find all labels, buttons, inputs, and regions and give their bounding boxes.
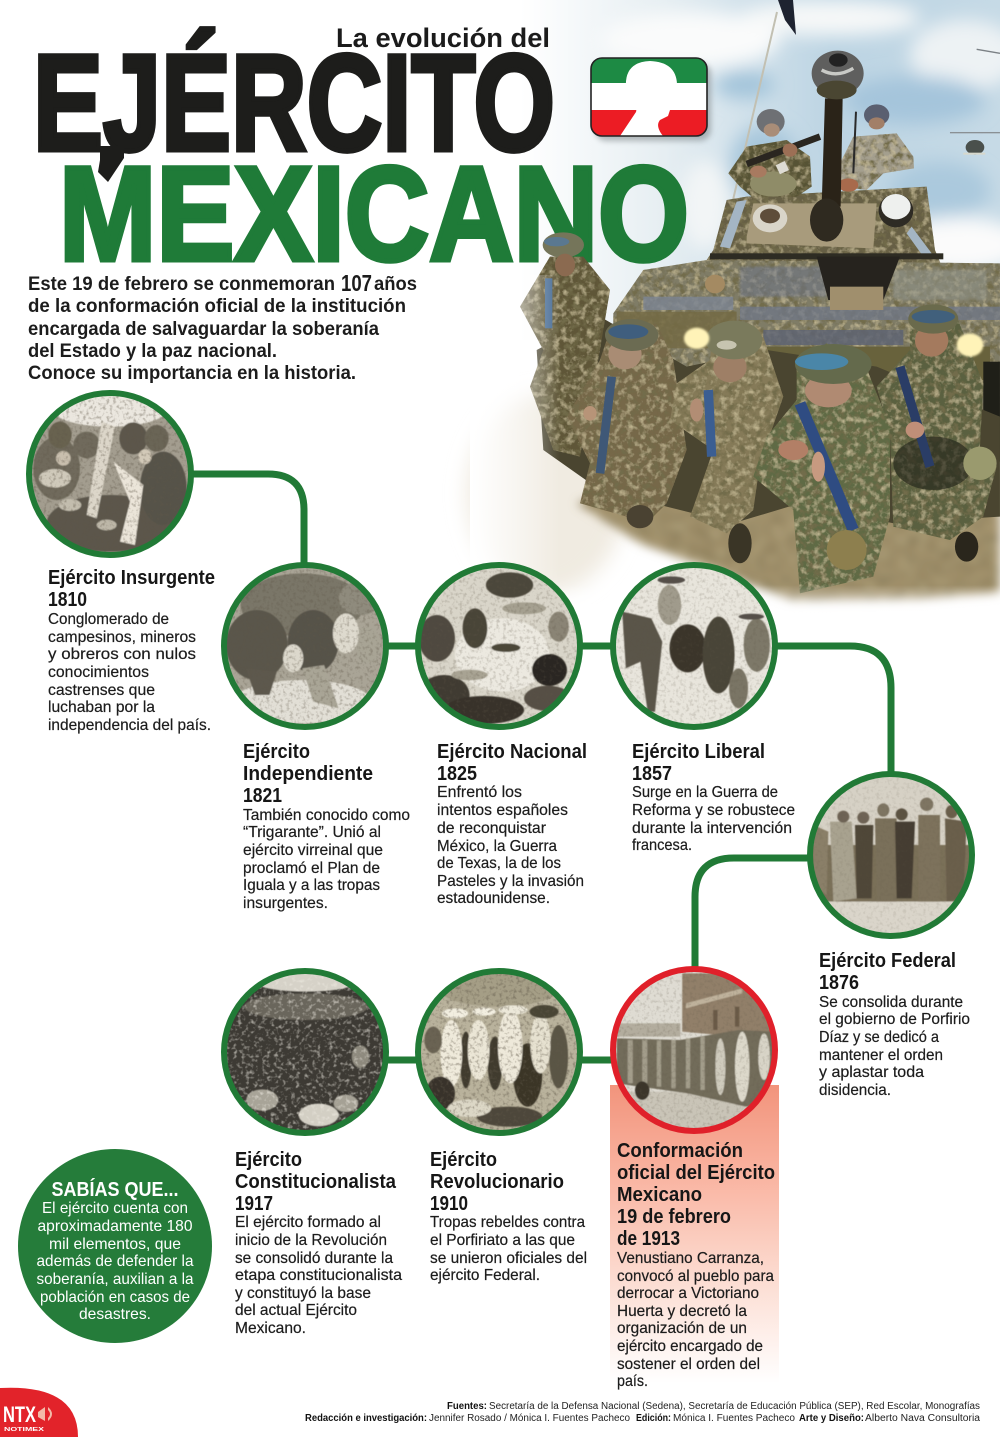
credits: team: Edición: [636,1413,671,1424]
description: del actual Ejército [235,1302,357,1319]
description [437,784,584,907]
credits: team [305,1413,980,1424]
title: La evolución del: La evolución del [336,23,550,53]
description: Huerta y decretó la [617,1303,747,1320]
heading [819,950,956,994]
photo: liberal soldiers [611,563,777,729]
description: país. [617,1373,648,1390]
description: proclamó el Plan de [243,860,380,877]
heading [235,1149,397,1215]
description: durante la intervención [632,820,792,837]
description: se consolidó durante la [235,1250,393,1267]
description: y aplastar toda [819,1064,924,1081]
description: Enfrentó los [437,784,522,801]
description: sostener el orden del [617,1356,760,1373]
description: Surge en la Guerra de [632,784,778,801]
description: insurgentes. [243,895,328,912]
callout: sabías que: desastres. [79,1306,151,1323]
helicopter [950,49,1000,155]
heading: Ejército Liberal [632,741,765,763]
description: derrocar a Victoriano [617,1285,759,1302]
description: Venustiano Carranza, [617,1250,764,1267]
timeline connectors [190,474,891,1060]
heading [632,741,765,785]
description [632,784,795,854]
intro text: Este 19 de febrero se conmemoran [28,274,335,295]
heading [48,567,215,611]
intro text [28,270,417,384]
description: Mexicano. [235,1320,306,1337]
description: ejército Federal. [430,1267,540,1284]
description: convocó al pueblo para [617,1268,774,1285]
heading: 1917 [235,1193,273,1215]
intro text: 107 [341,270,372,296]
red highlight panel [610,1085,779,1383]
heading: 1876 [819,972,859,994]
photo: troops in formation [611,967,779,1135]
callout: sabías que: SABÍAS QUE... [52,1178,178,1201]
description [819,994,970,1099]
description: “Trigarante”. Unió al [243,824,381,841]
heading: de 1913 [617,1228,680,1250]
heading: Revolucionario [430,1171,564,1193]
intro text: encargada de salvaguardar la soberanía [28,319,379,340]
description: castrenses que [48,682,155,699]
description [243,807,410,912]
credits: sources: Fuentes: [447,1401,487,1412]
photo: battle scene [416,563,582,729]
description [617,1250,774,1390]
description: disidencia. [819,1082,891,1099]
background photo: sky and armoured vehicle [520,0,1000,340]
headlights [684,328,983,357]
credits: sources: Secretaría de la Defensa Nacional (Sedena), Secretaría de Educación Pública (SEP), Red Escolar, Monografías [489,1401,980,1412]
description: El ejército formado al [235,1214,381,1231]
heading: 1810 [48,589,87,611]
timeline item 1857 [611,563,795,854]
description [48,611,211,734]
description: se unieron oficiales del [430,1250,587,1267]
description: independencia del país. [48,717,211,734]
description: etapa constitucionalista [235,1267,402,1284]
photo: cavalry [222,563,388,729]
credits: team: Redacción e investigación: [305,1413,427,1424]
heading: 1857 [632,763,672,785]
description: También conocido como [243,807,410,824]
callout: sabías que: soberanía, auxilian a la [36,1271,194,1288]
callout: sabías que: aproximadamente 180 [38,1218,193,1235]
credits: team: Arte y Diseño: [799,1413,864,1424]
description: intentos españoles [437,802,568,819]
soldiers gear and faces [543,232,997,570]
heading: Ejército Insurgente [48,567,215,589]
intro text: años [374,274,417,295]
callout: sabías que: mil elementos, que [49,1236,181,1253]
description: ejército encargado de [617,1338,763,1355]
description: y constituyó la base [235,1285,371,1302]
timeline item 1821 [222,563,410,912]
callout: sabías que: población en casos de [40,1289,190,1306]
description: luchaban por la [48,699,155,716]
description: de reconquistar [437,820,547,837]
description: Tropas rebeldes contra [430,1214,585,1231]
callout: sabías que: además de defender la [36,1253,194,1270]
description: Se consolida durante [819,994,963,1011]
description: y obreros con nulos [48,646,196,663]
callout: sabías que [18,1149,212,1343]
description: ejército virreinal que [243,842,383,859]
tank gun [810,51,864,242]
credits: team: Jennifer Rosado / Mónica I. Fuentes Pacheco [429,1413,630,1424]
description: Reforma y se robustece [632,802,795,819]
background photo: kneeling soldiers [465,232,1000,623]
credits: team: Alberto Nava Consultoria [865,1413,980,1424]
photo: federal soldiers in a row [808,772,974,938]
heading: Independiente [243,763,373,785]
description: el Porfiriato a las que [430,1232,575,1249]
heading [437,741,587,785]
timeline item 1825 [416,563,587,907]
heading: Ejército [235,1149,302,1171]
description: Iguala y a las tropas [243,877,380,894]
logo: NTX Notimex: NOTIMEX [4,1427,45,1433]
title: EJÉRCITO: EJÉRCITO [33,27,555,180]
soldier on turret, right [838,104,914,192]
soldiers bodies [520,257,997,593]
soldier on turret, left [728,109,820,197]
description: el gobierno de Porfirio [819,1011,970,1028]
description [235,1214,402,1337]
heading: Ejército Nacional [437,741,587,763]
timeline item 1917 [222,969,402,1337]
description: conocimientos [48,664,149,681]
credits: team: Mónica I. Fuentes Pacheco [673,1413,795,1424]
tank hull [613,257,1000,462]
heading: Ejército Federal [819,950,956,972]
heading: 19 de febrero [617,1206,731,1228]
timeline item 1876 [808,772,974,1099]
description: francesa. [632,837,692,854]
title: MEXICANO: MEXICANO [59,140,689,289]
description: de Texas, la de los [437,855,561,872]
shadow mass behind soldiers [537,317,1000,523]
description: Díaz y se dedicó a [819,1029,939,1046]
callout: sabías que: El ejército cuenta con [42,1200,188,1217]
timeline item 1810 [27,391,215,734]
heading: Mexicano [617,1184,702,1206]
description: Conglomerado de [48,611,169,628]
intro text: Conoce su importancia en la historia. [28,363,356,384]
intro text: del Estado y la paz nacional. [28,341,277,362]
intro text: de la conformación oficial de la institución [28,296,406,317]
description: México, la Guerra [437,838,557,855]
description: campesinos, mineros [48,629,196,646]
heading: oficial del Ejército [617,1162,775,1184]
heading: 1825 [437,763,477,785]
photo: insurgent crowd [27,391,193,557]
heading: Ejército [430,1149,497,1171]
photo: revolutionaries with sombreros [416,969,582,1135]
description: inicio de la Revolución [235,1232,387,1249]
ground [467,393,1000,602]
heading [617,1140,775,1250]
heading [243,741,373,807]
icon: flag logo with soldier silhouette [591,58,711,141]
flag and antenna [733,0,796,200]
timeline item 1910 [416,969,587,1284]
description: estadounidense. [437,890,550,907]
heading: Conformación [617,1140,743,1162]
timeline item 1913 highlighted [611,967,779,1390]
photo: constitutionalist group [222,969,388,1135]
logo: NTX Notimex: NTX [3,1402,36,1427]
heading: 1821 [243,785,282,807]
heading: Ejército [243,741,310,763]
description: organización de un [617,1320,747,1337]
heading [430,1149,564,1215]
description: Pasteles y la invasión [437,873,584,890]
logo: NTX Notimex [0,1388,78,1437]
heading: 1910 [430,1193,468,1215]
description [430,1214,587,1284]
description: mantener el orden [819,1047,943,1064]
heading: Constitucionalista [235,1171,397,1193]
tank turret [700,187,943,270]
